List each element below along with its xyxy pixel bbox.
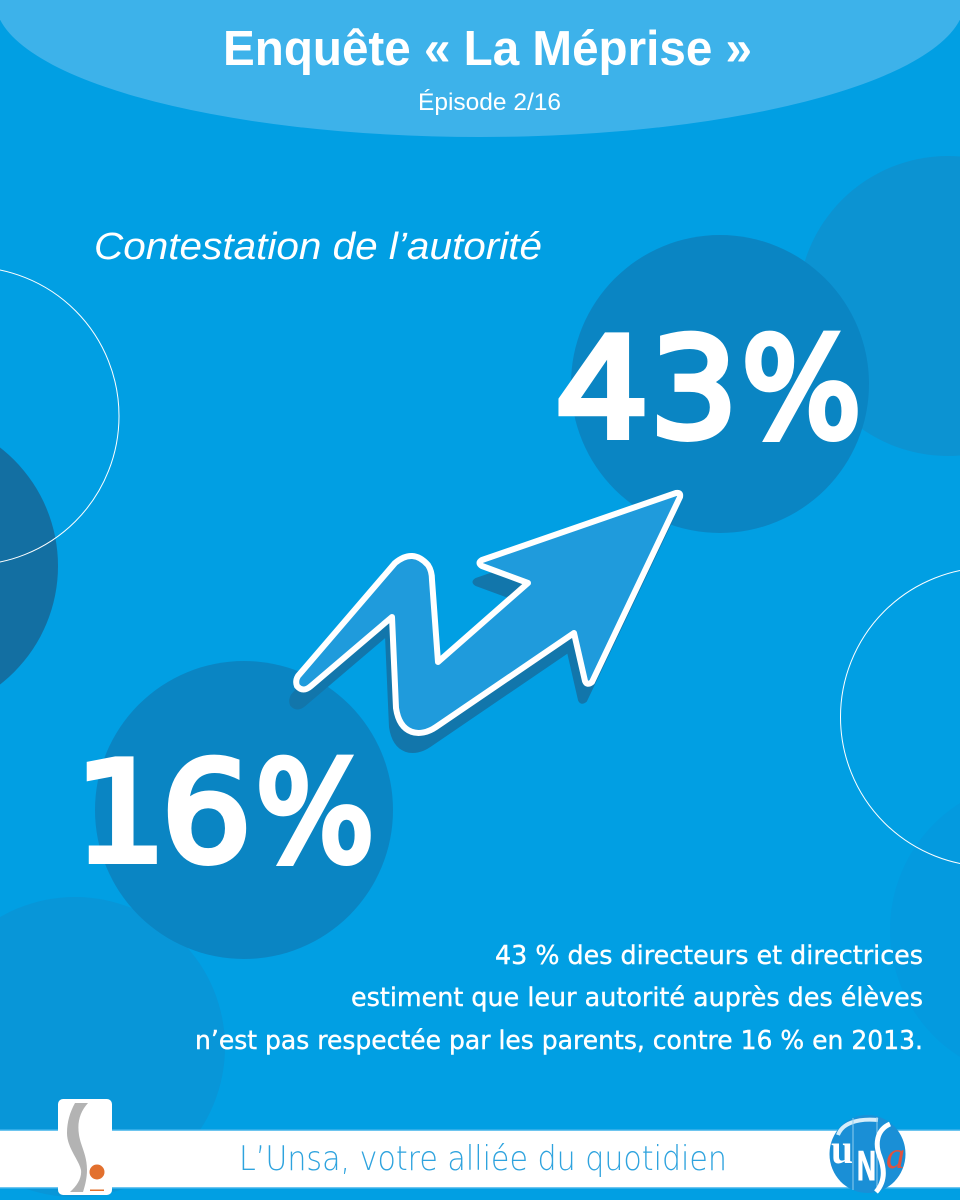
body text (195, 941, 923, 1056)
stat: 16%: 6 (162, 732, 252, 894)
footer slogan: L’Unsa, votre alliée du quotidien (239, 1139, 727, 1179)
body text: 43 % des directeurs et directrices (495, 941, 923, 971)
stat: 16% (74, 732, 374, 894)
title: Enquête « La Méprise » (223, 22, 752, 76)
decorative circle: bottom right (890, 780, 960, 1080)
subtitle: Épisode 2/16 (418, 89, 561, 116)
decorative circle: top right (798, 156, 960, 456)
decorative circle: left dark (0, 416, 58, 716)
logo: UNSA (830, 1115, 906, 1193)
stat: 16%: 1 (74, 732, 166, 894)
arrow (296, 493, 680, 733)
stat: 16%: % (256, 732, 374, 894)
footer band (0, 1130, 960, 1188)
stat: 43% (555, 308, 862, 470)
logo: UNSA: u (831, 1127, 853, 1173)
body text: n’est pas respectée par les parents, contre 16 % en 2013. (195, 1026, 923, 1056)
logo: UNSA: a (886, 1135, 905, 1177)
stat: 43%: 3 (650, 308, 738, 470)
stat: 43%: 4 (555, 308, 649, 470)
outline circle: left (0, 267, 119, 565)
outline circle: right (840, 568, 960, 866)
logo: S card (58, 1099, 112, 1195)
circle behind 43% (571, 235, 869, 533)
decorative circle: bottom left (0, 897, 225, 1197)
heading: contestation: Contestation de l’autorité (94, 226, 542, 268)
circle behind 16% (95, 661, 393, 959)
body text: estiment que leur autorité auprès des élèves (351, 983, 923, 1013)
header ellipse (0, 0, 960, 137)
stat: 43%: % (742, 308, 862, 470)
logo: UNSA: N (857, 1142, 876, 1189)
arrow shadow (290, 512, 674, 752)
